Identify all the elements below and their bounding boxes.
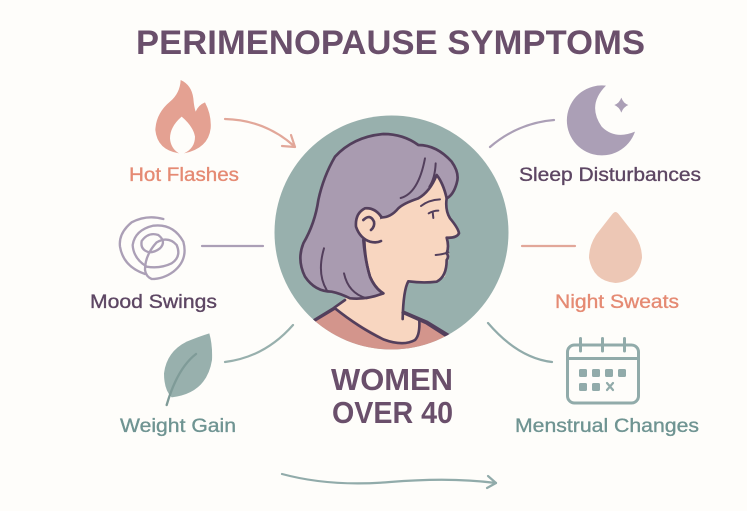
hair [300, 134, 458, 299]
connector: weight gain [225, 325, 293, 362]
neck and face [335, 175, 459, 343]
connector: menstrual changes [488, 323, 552, 362]
label: menstrual changes: Menstrual Changes [515, 415, 699, 437]
caption: women over 40: OVER 40 [332, 395, 453, 430]
label: night sweats: Night Sweats [555, 291, 679, 313]
caption: women over 40: WOMEN [331, 362, 453, 397]
shirt [314, 309, 450, 350]
icon: droplet [589, 212, 642, 283]
connector: night sweats [522, 245, 575, 247]
label: weight gain: Weight Gain [120, 415, 236, 437]
face outline [403, 198, 459, 319]
caption: women over 40 [331, 362, 453, 430]
arrow: hot flashes [225, 119, 295, 147]
connector: mood swings [202, 245, 263, 247]
icon: calendar [568, 338, 638, 403]
icon: moon and star [567, 85, 635, 155]
central portrait [274, 116, 508, 360]
label: hot flashes: Hot Flashes [129, 164, 239, 186]
label: sleep disturbances: Sleep Disturbances [519, 164, 701, 186]
facial features [421, 199, 440, 206]
icon: tangled spiral [120, 217, 185, 279]
title: PERIMENOPAUSE SYMPTOMS [136, 24, 645, 62]
ear [357, 210, 380, 239]
icon: flame [155, 80, 211, 153]
connector: sleep disturbances [490, 120, 554, 147]
icon: leaf [164, 333, 212, 405]
hair strands [401, 158, 425, 198]
label: mood swings: Mood Swings [90, 291, 217, 313]
arrow: bottom progression [282, 474, 496, 488]
